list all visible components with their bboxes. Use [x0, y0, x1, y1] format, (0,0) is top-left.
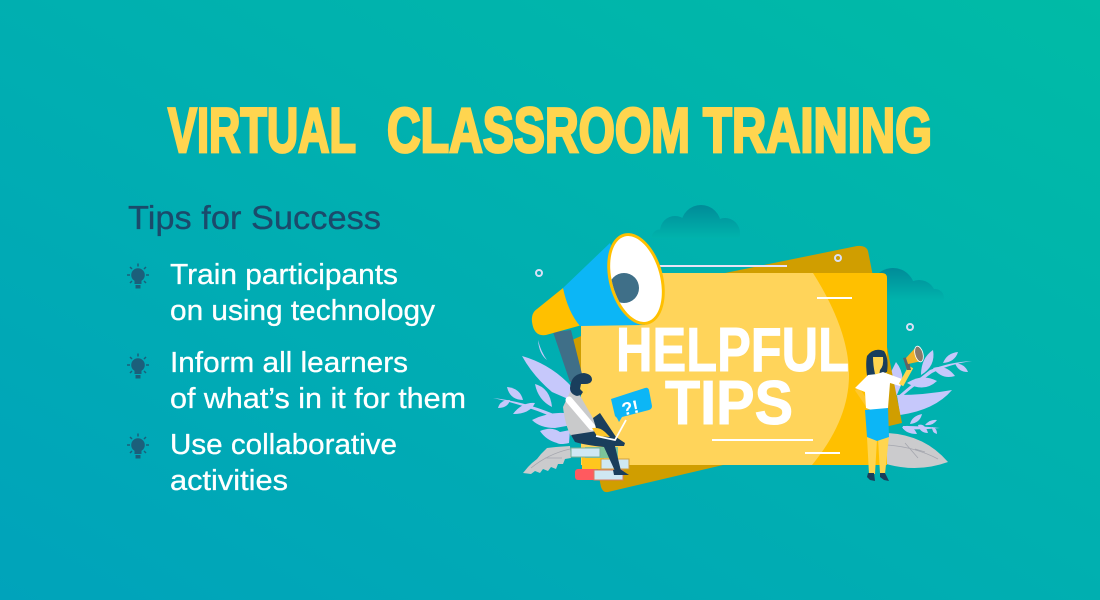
man shirt [563, 392, 597, 436]
tip 3 text [170, 429, 397, 497]
title: VIRTUAL [168, 96, 356, 166]
man hand [592, 428, 610, 437]
title [168, 96, 932, 166]
subheading: Tips for Success [128, 199, 381, 236]
tip 1 text: on using technology [170, 295, 435, 327]
icon: light bulb 1 [127, 264, 149, 288]
man shoe [613, 469, 629, 475]
woman with megaphone [855, 345, 925, 481]
helpful tips text: TIPS [665, 369, 793, 438]
cloud left [660, 205, 740, 231]
helpful tips text: HELPFUL [616, 316, 849, 385]
tip 1 text [170, 259, 435, 327]
man trousers [571, 413, 625, 471]
man arm [569, 400, 592, 427]
woman arm left [857, 389, 870, 408]
woman shoes [867, 473, 889, 481]
helpful tips text [616, 316, 849, 438]
man face [579, 381, 588, 395]
tip 1 [127, 259, 435, 327]
megaphone centre [609, 273, 639, 303]
man hair and beard [570, 373, 592, 396]
left lilac leaves [493, 340, 575, 444]
tip 2 [127, 347, 466, 415]
small megaphone rim [913, 345, 925, 363]
book stack [571, 447, 629, 480]
tip 1 text: Train participants [170, 259, 398, 291]
woman face [873, 357, 883, 376]
woman shirt [855, 372, 902, 412]
tip 2 text: of what’s in it for them [170, 383, 466, 415]
cloud right [879, 268, 942, 294]
tip 3 text: activities [170, 465, 288, 497]
right grey leaf [880, 433, 948, 468]
card lines [650, 266, 852, 453]
laptop [596, 420, 626, 440]
megaphone [532, 233, 665, 336]
megaphone opening [601, 230, 671, 328]
woman skirt [865, 408, 889, 441]
title: TRAINING [703, 96, 932, 166]
megaphone grip [532, 288, 582, 335]
tip 2 text [170, 347, 466, 415]
right lilac leaves [891, 350, 972, 434]
illustration: helpful tips [493, 205, 972, 492]
small megaphone [906, 347, 922, 364]
card highlight [581, 273, 849, 465]
title: CLASSROOM [387, 96, 690, 166]
card back [572, 246, 902, 492]
speech bubble: ?! [620, 396, 641, 420]
icon: light bulb 3 [127, 434, 149, 458]
left grey leaf [523, 446, 571, 474]
icon: light bulb 2 [127, 354, 149, 378]
megaphone pole [553, 330, 583, 382]
card front [581, 273, 887, 465]
decorative rings [536, 255, 913, 330]
small megaphone grip [903, 357, 911, 370]
woman hair [866, 350, 888, 382]
tip 3 [127, 429, 397, 497]
woman raised arm [901, 367, 911, 385]
tip 2 text: Inform all learners [170, 347, 408, 379]
man with laptop on books [563, 373, 652, 480]
megaphone rim [598, 227, 674, 331]
woman legs [867, 436, 889, 474]
megaphone cone [563, 243, 645, 326]
tip 3 text: Use collaborative [170, 429, 397, 461]
